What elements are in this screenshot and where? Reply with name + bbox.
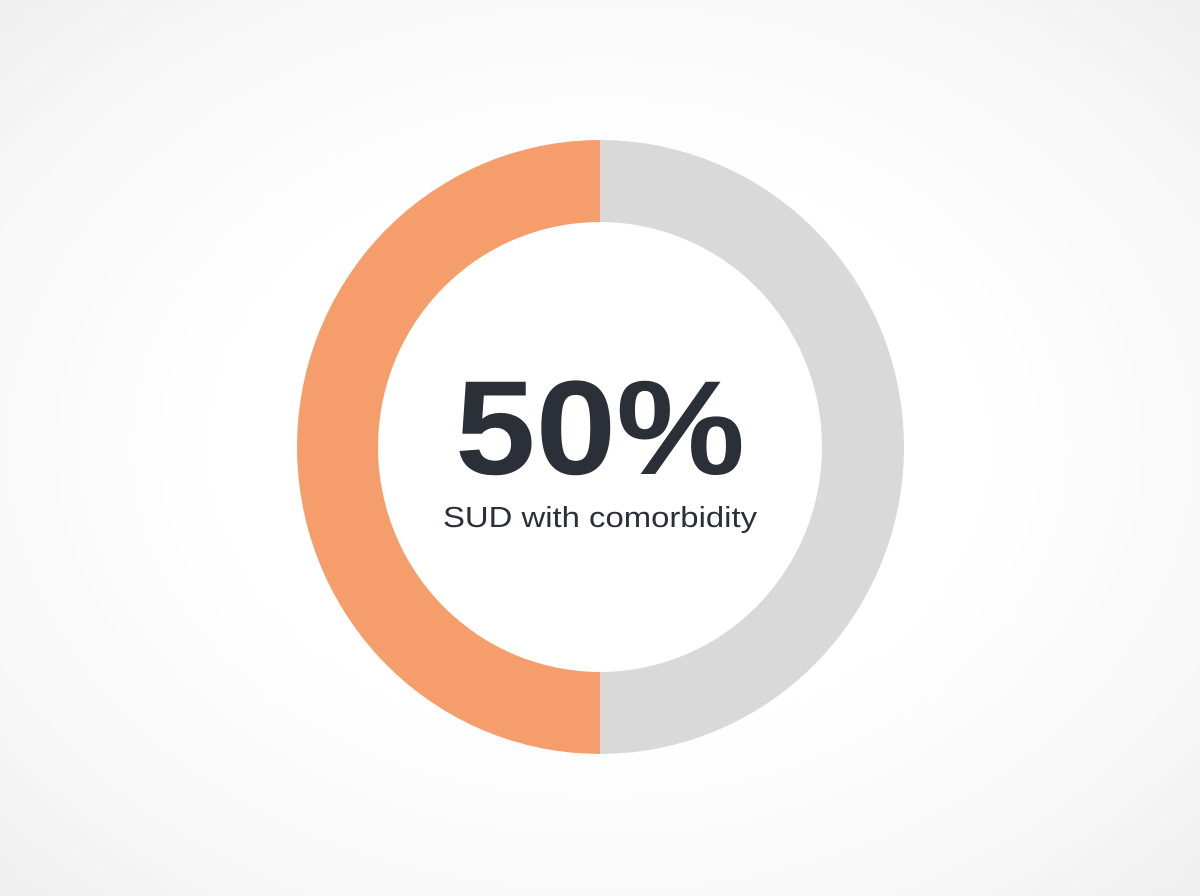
- inner circle background: [378, 225, 822, 669]
- segment: 50% orange: [297, 140, 600, 754]
- big number: 50%: [455, 354, 745, 503]
- segment: remaining 50% grey: [600, 140, 904, 754]
- label: SUD with comorbidity: [443, 502, 758, 534]
